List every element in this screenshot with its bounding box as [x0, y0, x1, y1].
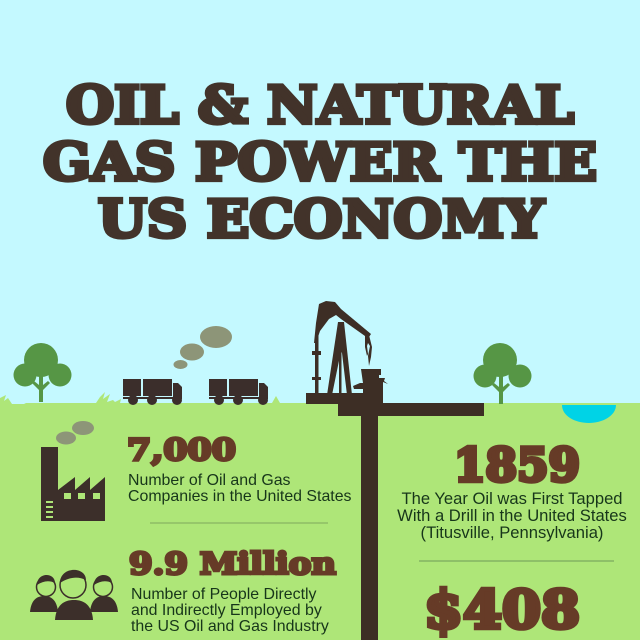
title — [43, 76, 597, 250]
stat: 1859: 1859 — [454, 438, 580, 492]
ground — [0, 392, 640, 640]
stat: 9.9 Million: and Indirectly Employed by — [131, 602, 322, 619]
stat: 1859 — [397, 438, 627, 542]
stat: 9.9 Million: Number of People Directly — [131, 586, 317, 603]
icon: left tree — [14, 343, 72, 402]
stat: $408: $408 — [424, 580, 580, 640]
stat: 1859: (Titusville, Pennsylvania) — [421, 523, 603, 542]
title: OIL & NATURAL — [66, 76, 574, 136]
stat: 9.9 Million — [129, 547, 336, 635]
title: GAS POWER THE — [43, 133, 597, 193]
icon: truck 2 — [209, 379, 268, 405]
icon: smoke above trucks — [174, 326, 232, 369]
stat: 7,000 — [127, 433, 352, 505]
stat: 7,000: Companies in the United States — [128, 488, 352, 505]
icon: pond — [562, 405, 616, 423]
icon: right tree — [474, 343, 532, 404]
stat: 9.9 Million: the US Oil and Gas Industry — [131, 618, 329, 635]
stat: 9.9 Million: 9.9 Million — [129, 547, 336, 582]
title: US ECONOMY — [98, 190, 545, 250]
icon: factory — [41, 421, 105, 521]
stat: 1859: With a Drill in the United States — [397, 506, 627, 525]
stat: 1859: The Year Oil was First Tapped — [401, 489, 623, 508]
icon: people — [30, 570, 118, 620]
icon: oil pump and pipe — [306, 301, 484, 640]
stat: 7,000: Number of Oil and Gas — [128, 472, 291, 489]
stat: 7,000: 7,000 — [127, 433, 236, 468]
icon: truck 1 — [123, 379, 182, 405]
